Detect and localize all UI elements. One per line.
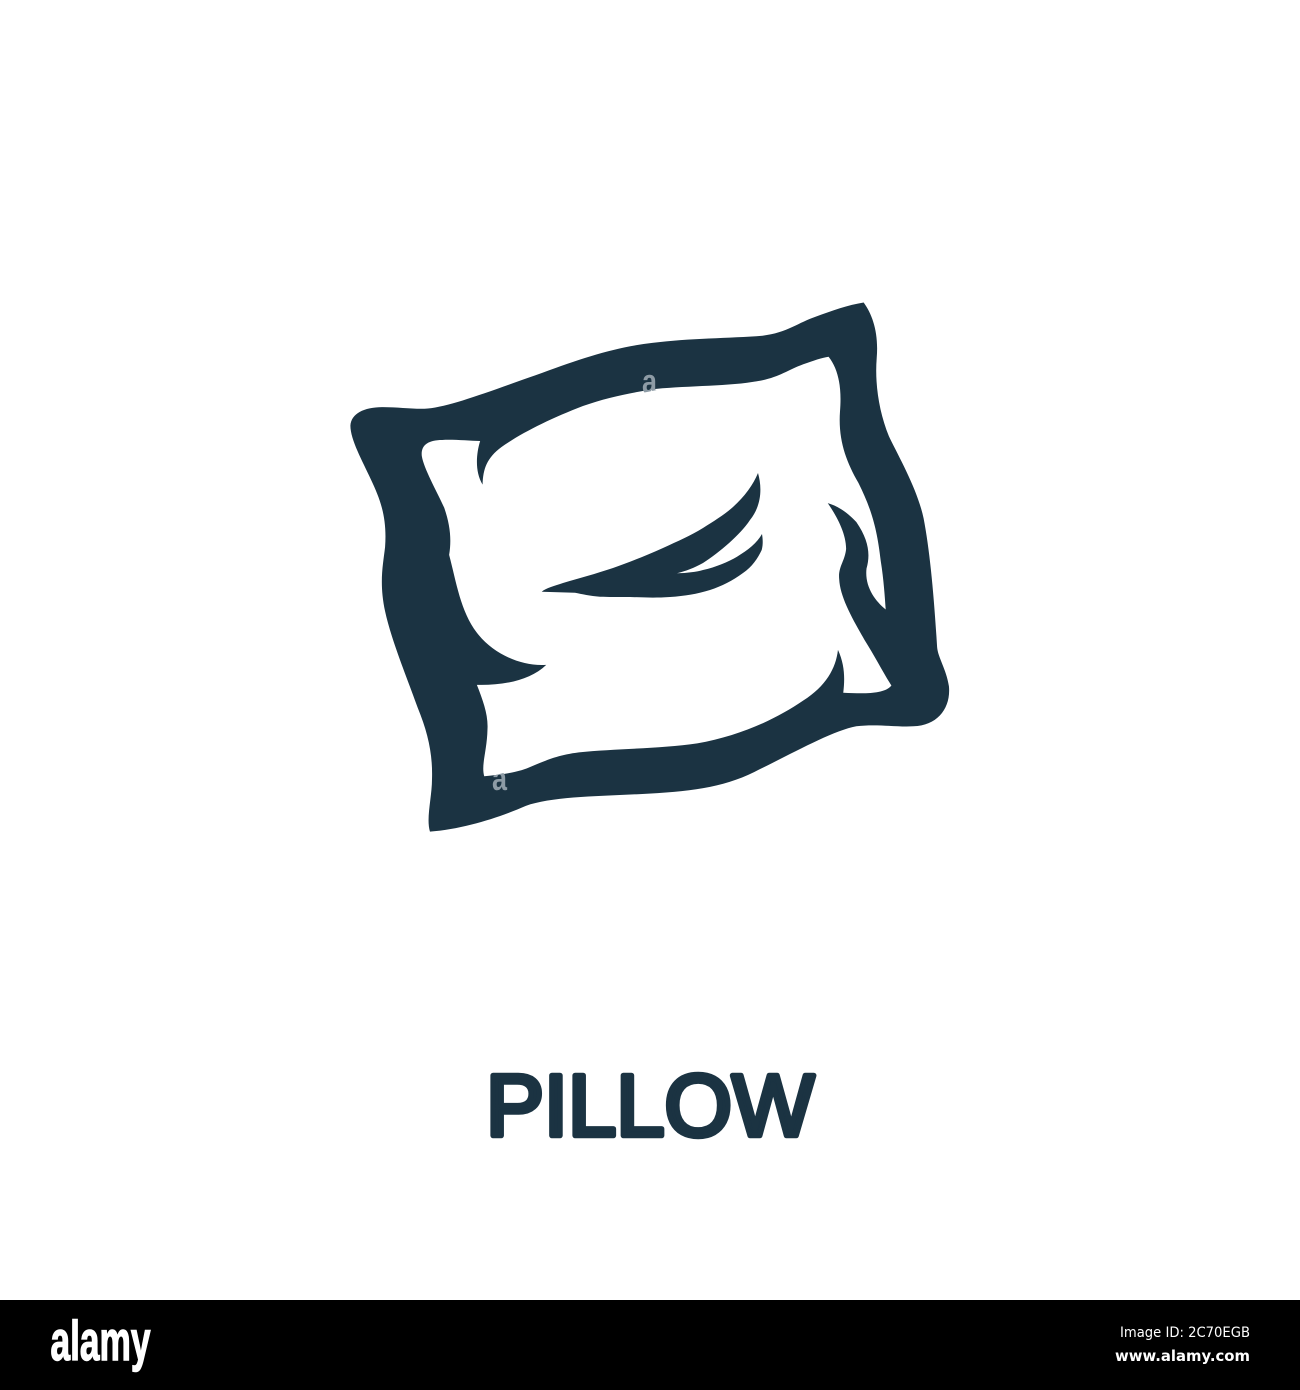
pillow outline xyxy=(350,302,949,832)
image id: Image ID: 2C70EGB xyxy=(1120,1325,1250,1341)
pillow crease xyxy=(542,473,763,598)
title: PILLOW xyxy=(486,1058,814,1154)
footer bar xyxy=(0,1300,1300,1390)
watermark letter top: a xyxy=(642,363,658,401)
footer logo: alamy xyxy=(50,1309,150,1372)
icon: pillow xyxy=(350,302,949,832)
website: www.alamy.com xyxy=(1115,1347,1250,1365)
watermark letter bottom: a xyxy=(492,760,508,798)
